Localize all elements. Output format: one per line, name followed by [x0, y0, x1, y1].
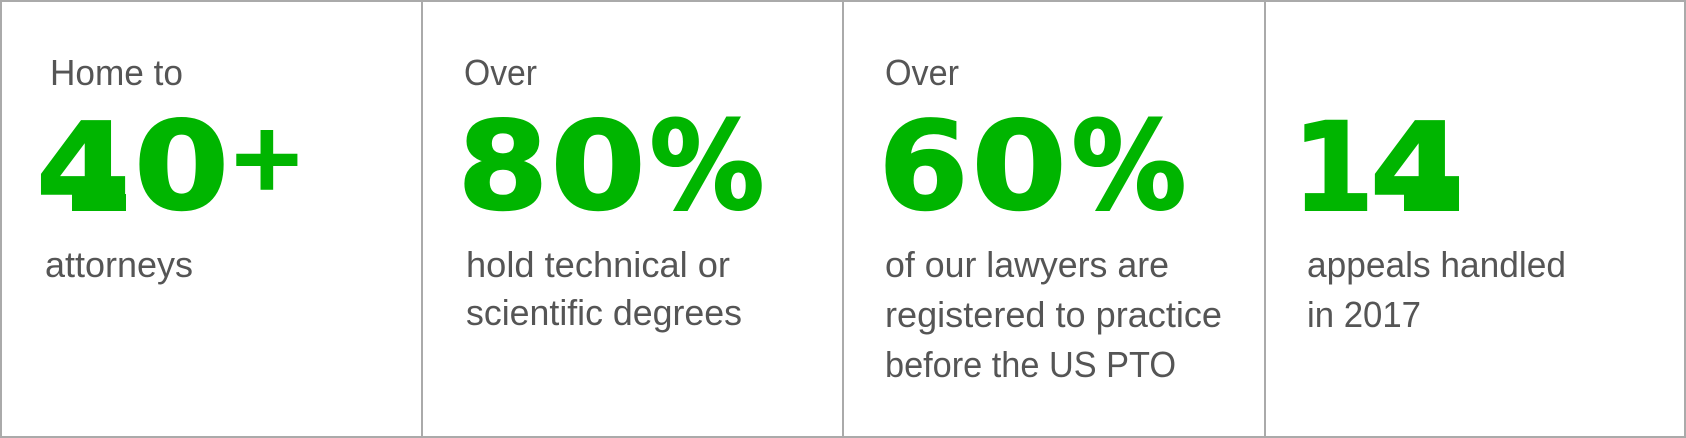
text: attorneys: attorneys — [45, 244, 193, 285]
stat: 60%: 0 — [972, 95, 1067, 238]
stat: 80%: 8 — [458, 96, 548, 237]
text: Over: Over — [464, 52, 537, 93]
text: of our lawyers are registered to practice before the US PTO: of our lawyers are — [885, 244, 1169, 285]
text: appeals handled in 2017 — [1307, 244, 1566, 335]
stat: 60%: % — [1072, 95, 1186, 237]
text: appeals handled in 2017: appeals handled — [1307, 244, 1566, 285]
text: hold technical or scientific degrees: scientific degrees — [466, 292, 742, 333]
stat: 80%: % — [650, 95, 764, 237]
stat: 40+: + — [227, 104, 307, 212]
text: of our lawyers are registered to practice before the US PTO — [885, 244, 1222, 385]
stat: 14: 1 — [1292, 97, 1374, 239]
text: hold technical or scientific degrees — [466, 244, 742, 333]
panel: 60% registered lawyers — [878, 52, 1222, 385]
stat: 14: 4 — [1370, 97, 1464, 239]
panel: 40+ attorneys — [36, 52, 307, 285]
stat: 14 — [1292, 97, 1464, 239]
stat: 80%: 0 — [551, 95, 646, 238]
stat: 60%: 6 — [878, 95, 968, 238]
text: Home to: Home to — [50, 52, 183, 93]
panel: 80% technical degrees — [458, 52, 764, 333]
panel: 14 appeals — [1292, 97, 1566, 335]
text: hold technical or scientific degrees: hold technical or — [466, 244, 730, 285]
stat: 60% — [878, 95, 1186, 238]
stat: 80% — [458, 95, 764, 238]
text: of our lawyers are registered to practice before the US PTO: before the US PTO — [885, 344, 1176, 385]
stat: 40+: 4 — [36, 97, 130, 239]
text: Over: Over — [885, 52, 959, 93]
stat: 40+: 0 — [134, 95, 229, 238]
text: of our lawyers are registered to practice before the US PTO: registered to practice — [885, 294, 1222, 335]
text: appeals handled in 2017: in 2017 — [1307, 294, 1421, 335]
stat: 40+ — [36, 95, 307, 239]
